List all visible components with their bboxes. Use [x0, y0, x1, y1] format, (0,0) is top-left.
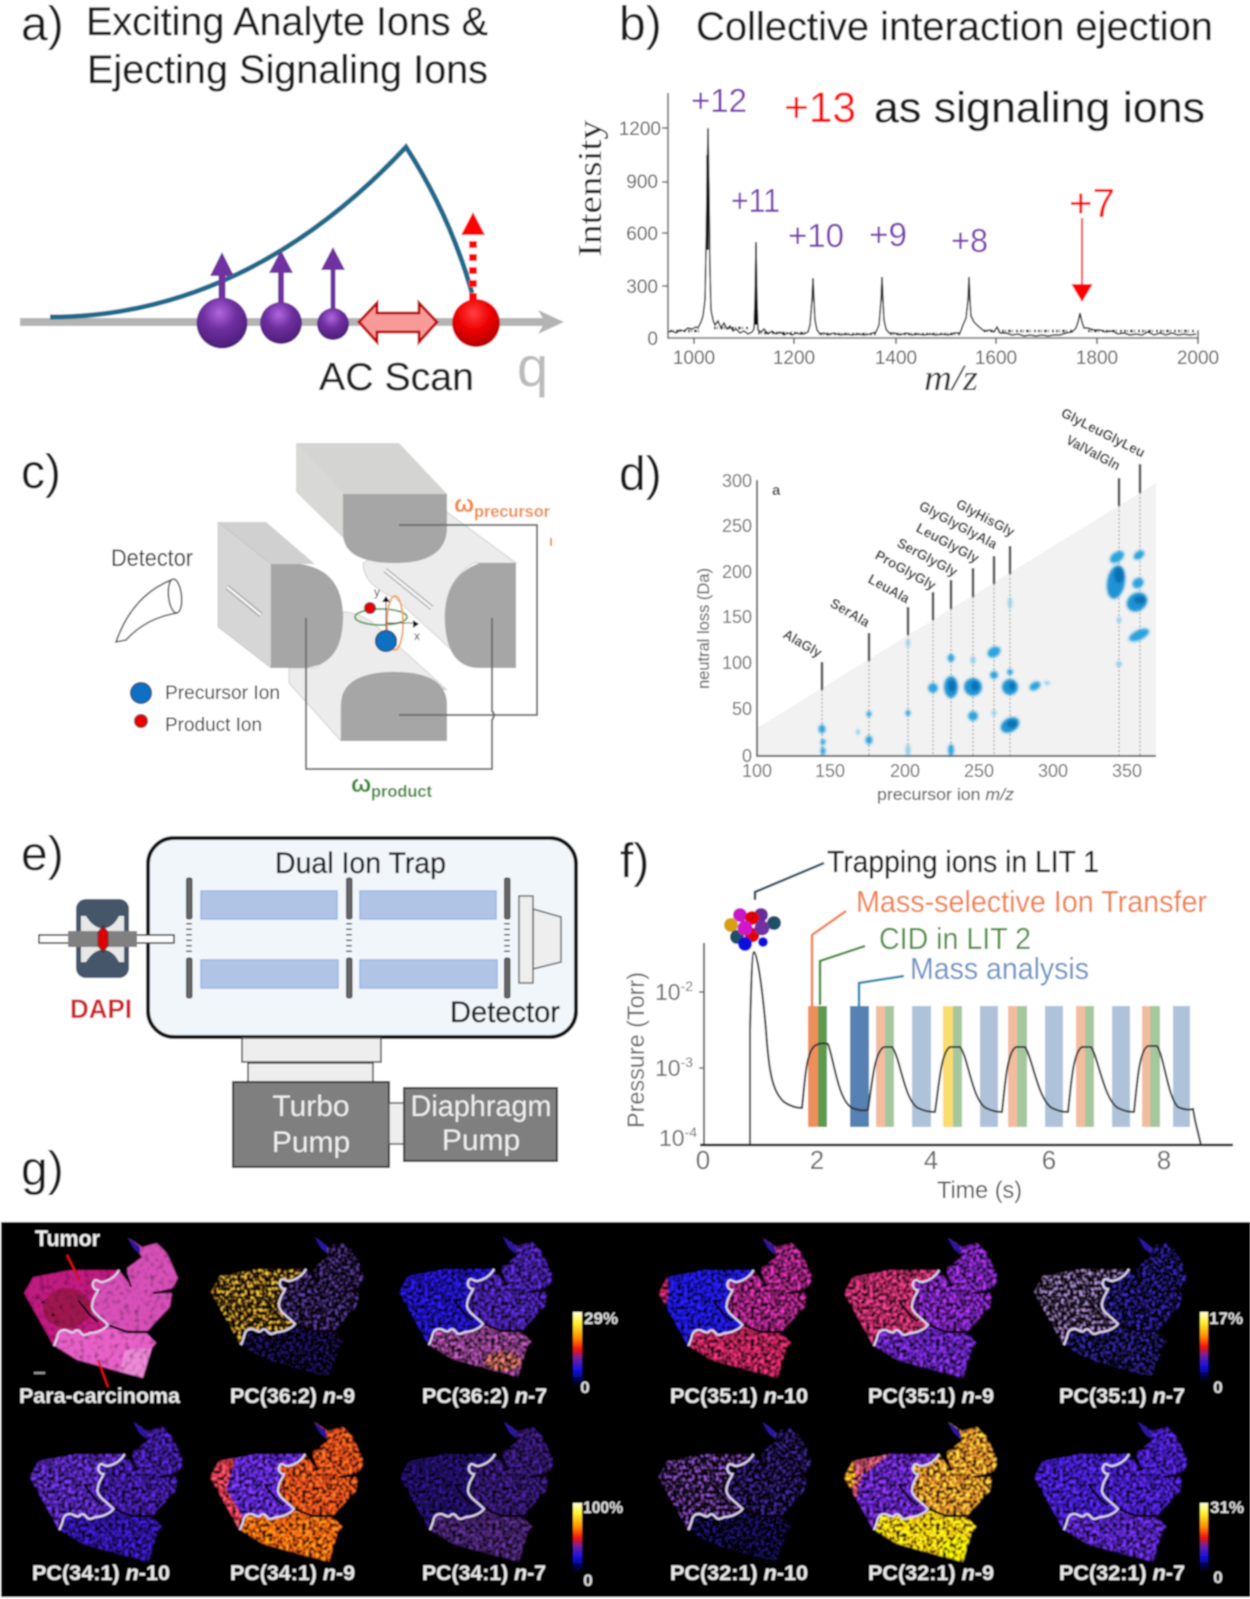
- legend: Precursor Ion: [165, 683, 280, 704]
- turbo pump: [233, 1082, 389, 1167]
- charge state labels: +11: [731, 182, 780, 219]
- y tick labels: 900: [626, 172, 658, 193]
- y tick labels d: 150: [722, 607, 752, 627]
- peptide labels: GlyHisGly: [954, 496, 1018, 540]
- peptide labels: [780, 404, 1148, 661]
- map labels: PC(35:1) n-10: [670, 1385, 808, 1408]
- map: PC(34:1) n-7: [400, 1422, 554, 1562]
- map labels: PC(32:1) n-9: [868, 1562, 994, 1585]
- y axis title d: neutral loss (Da): [694, 568, 713, 689]
- x tick labels d: 200: [890, 761, 920, 781]
- peptide labels: GlyLeuGlyLeu: [1059, 404, 1148, 460]
- solid label stems: [822, 464, 1140, 690]
- y tick labels: 0: [647, 329, 658, 350]
- y tick labels f: -2: [681, 978, 693, 994]
- colorbar 100%: 0: [583, 1571, 593, 1590]
- charge state labels: [691, 82, 988, 259]
- ion motion detail: x: [414, 629, 420, 643]
- map: PC(35:1) n-7: [1034, 1237, 1188, 1377]
- x tick labels f: 2: [810, 1145, 824, 1175]
- ion motion detail: [355, 585, 420, 652]
- y tick labels d: 100: [722, 653, 752, 673]
- charge state labels: +8: [951, 222, 988, 259]
- shaded triangle: [757, 483, 1156, 756]
- detector label: Detector: [111, 545, 193, 572]
- red arrow to +7 peak: [1073, 218, 1091, 300]
- x tick labels: 1400: [875, 348, 917, 369]
- legend: Product Ion: [165, 715, 262, 736]
- x tick labels d: 100: [742, 761, 772, 781]
- y tick labels d: 50: [732, 699, 752, 719]
- circuit wires: [306, 525, 537, 769]
- black background: [1, 1222, 1250, 1597]
- DAPI valve: [39, 899, 174, 978]
- charge state labels: +10: [788, 217, 844, 254]
- left electrode: [218, 522, 343, 668]
- x tick labels d: 250: [964, 761, 994, 781]
- signaling ions note: as signaling ions: [874, 84, 1205, 132]
- signaling ions note: +13: [784, 84, 856, 132]
- peptide labels: LeuGlyGly: [914, 520, 982, 566]
- inset letter: a: [772, 482, 781, 499]
- peptide labels: AlaGly: [780, 626, 825, 661]
- omega product label: ω: [351, 771, 371, 798]
- y tick labels d: 300: [722, 471, 752, 491]
- x tick labels f: 0: [696, 1145, 710, 1175]
- peptide labels: SerGlyGly: [895, 535, 961, 580]
- legend: [130, 682, 280, 736]
- top electrode: [296, 443, 447, 563]
- diaphragm pump: Diaphragm: [410, 1090, 552, 1123]
- colorbar 29%: [573, 1309, 618, 1397]
- spectrum axes: [662, 93, 1198, 344]
- AC scan label: AC Scan: [319, 356, 474, 399]
- x axis title: m/z: [924, 358, 978, 399]
- end plates: [186, 878, 510, 998]
- analysis label: Mass analysis: [910, 951, 1089, 986]
- title a: Exciting Analyte Ions &: [86, 0, 488, 44]
- map labels: PC(35:1) n-9: [868, 1385, 994, 1408]
- peptide labels: ProGlyGly: [873, 547, 939, 593]
- panel label e: e): [21, 828, 64, 881]
- map labels: PC(35:1) n-7: [1059, 1385, 1185, 1408]
- trapping label: Trapping ions in LIT 1: [827, 844, 1099, 879]
- x tick labels: 1800: [1076, 348, 1118, 369]
- panel b: mass spectrum: [572, 0, 1219, 399]
- turbo pump: Turbo: [272, 1090, 350, 1123]
- tumor annotation: [35, 1226, 100, 1281]
- map labels: PC(36:2) n-7: [422, 1385, 547, 1408]
- panel label d: d): [619, 448, 662, 501]
- dual ion trap label: Dual Ion Trap: [275, 847, 446, 880]
- x tick labels f: 8: [1157, 1145, 1171, 1175]
- red ejected ion with dashed arrow: [452, 212, 500, 347]
- trap electrodes: [201, 891, 497, 988]
- +7 label: +7: [1069, 180, 1115, 226]
- panel f: pressure trace: [620, 835, 1233, 1204]
- x tick labels d: 350: [1112, 761, 1142, 781]
- panel label g: g): [21, 1143, 64, 1196]
- map labels: PC(34:1) n-7: [422, 1562, 546, 1585]
- pump connector: [389, 1103, 404, 1144]
- map labels: PC(34:1) n-10: [32, 1562, 170, 1585]
- pressure curve: [750, 952, 1201, 1145]
- colorbar 31%: 31%: [1210, 1498, 1244, 1517]
- leader transfer: [812, 911, 846, 1007]
- x axis title f: Time (s): [937, 1177, 1022, 1204]
- omega product label: product: [371, 782, 432, 801]
- x tick labels: 1200: [773, 348, 815, 369]
- y axis title f: Pressure (Torr): [623, 972, 650, 1128]
- map: PC(32:1) n-9: [844, 1422, 998, 1562]
- vacuum chamber: [148, 838, 576, 1037]
- y tick labels d: 250: [722, 516, 752, 536]
- y tick labels: [619, 119, 661, 350]
- peptide labels: GlyGlyGlyAla: [917, 498, 1000, 552]
- x tick labels: [673, 348, 1219, 369]
- tumor annotation: Tumor: [35, 1226, 100, 1251]
- panel label f: f): [620, 835, 649, 888]
- charge state labels: +12: [691, 82, 747, 119]
- panel g: imaging maps: [1, 1222, 1250, 1597]
- y tick labels: 300: [626, 277, 658, 298]
- y tick labels d: [722, 471, 752, 766]
- dotted lines: [822, 493, 1140, 756]
- grid dashes: [189, 923, 507, 955]
- y tick labels f: -3: [681, 1054, 693, 1070]
- y tick labels f: 10: [659, 1125, 685, 1151]
- ion cluster icon: [724, 908, 781, 951]
- diaphragm pump: [404, 1088, 557, 1161]
- charge state labels: +9: [869, 216, 907, 253]
- leader trapping: [755, 863, 824, 900]
- peptide labels: ValValGln: [1064, 432, 1123, 473]
- purple ions with arrows: [196, 247, 349, 348]
- DAPI label: DAPI: [70, 994, 132, 1024]
- panel a: exciting and ejecting ions: [20, 0, 564, 399]
- colorbar 17%: 17%: [1209, 1309, 1243, 1328]
- map labels: PC(34:1) n-9: [230, 1562, 355, 1585]
- colorbar 31%: [1200, 1498, 1244, 1587]
- CID label: CID in LIT 2: [879, 921, 1031, 956]
- colorbar 100%: [573, 1498, 623, 1590]
- x tick labels f: 4: [924, 1145, 938, 1175]
- flange: [242, 1038, 381, 1082]
- map: PC(35:1) n-9: [844, 1238, 998, 1378]
- leader CID: [820, 946, 865, 1005]
- omega precursor label: ω: [454, 491, 474, 518]
- axes d: [757, 480, 1156, 756]
- detector icon: [116, 578, 183, 642]
- map labels: [32, 1385, 1185, 1585]
- panel e: instrument schematic: [21, 828, 576, 1196]
- x tick labels: 2000: [1177, 348, 1219, 369]
- colorbar 17%: 0: [1213, 1378, 1223, 1397]
- map: PC(36:2) n-9: [211, 1237, 365, 1377]
- colorbar 29%: 0: [580, 1378, 590, 1397]
- x tick labels d: 150: [815, 761, 845, 781]
- axes f: [699, 943, 1233, 1145]
- panel label c: c): [21, 446, 61, 499]
- leader analysis: [859, 976, 904, 1007]
- title a: Ejecting Signaling Ions: [87, 48, 488, 92]
- omega precursor label: [454, 491, 552, 546]
- rear light rod bodies: [289, 512, 516, 741]
- x tick labels f: 6: [1042, 1145, 1056, 1175]
- colorbar 100%: 100%: [583, 1498, 623, 1517]
- spectrum trace: [668, 128, 1196, 336]
- panel c: quadrupole schematic: [21, 443, 552, 801]
- x tick labels d: [742, 761, 1142, 781]
- blue signal blobs: [818, 548, 1151, 756]
- q label: q: [517, 335, 548, 398]
- x axis title d: precursor ion m/z: [877, 785, 1015, 804]
- x tick labels d: 300: [1038, 761, 1068, 781]
- x tick labels f: [696, 1145, 1171, 1175]
- map: H&E tissue: [24, 1238, 178, 1378]
- map: PC(32:1) n-7: [1034, 1422, 1188, 1562]
- AC scan double arrow: [359, 303, 437, 342]
- detector shape: [519, 896, 561, 983]
- diaphragm pump: Pump: [442, 1124, 520, 1157]
- timing bars: [808, 1006, 1190, 1127]
- map labels: PC(32:1) n-7: [1059, 1562, 1185, 1585]
- y tick labels f: 10: [655, 979, 681, 1005]
- map labels: PC(32:1) n-10: [670, 1562, 808, 1585]
- map: PC(34:1) n-9: [210, 1422, 364, 1562]
- map: PC(32:1) n-10: [658, 1422, 812, 1562]
- map labels: PC(36:2) n-9: [230, 1385, 355, 1408]
- y tick labels: 1200: [619, 119, 661, 140]
- para-carcinoma annotation: Para-carcinoma: [19, 1385, 180, 1408]
- y tick labels: 600: [626, 224, 658, 245]
- panel d: neutral loss map: [619, 404, 1156, 804]
- peptide labels: LeuAla: [866, 571, 913, 607]
- para-carcinoma annotation: [19, 1360, 180, 1408]
- y tick labels f: -4: [685, 1124, 697, 1140]
- omega precursor label: precursor: [474, 502, 550, 521]
- colorbar 31%: 0: [1213, 1568, 1223, 1587]
- omega product label: [351, 771, 432, 801]
- x tick labels: 1000: [673, 348, 715, 369]
- turbo pump: Pump: [272, 1126, 350, 1159]
- y tick labels d: 0: [742, 746, 752, 766]
- map: PC(35:1) n-10: [658, 1238, 812, 1378]
- ion motion detail: y: [374, 585, 380, 599]
- y tick labels f: 10: [655, 1055, 681, 1081]
- detector text e: Detector: [450, 996, 560, 1029]
- colorbar 17%: [1200, 1309, 1243, 1397]
- stability curve: [50, 147, 472, 317]
- title a: [86, 0, 488, 92]
- q axis arrow: [20, 310, 564, 334]
- y tick labels d: 200: [722, 562, 752, 582]
- title b: Collective interaction ejection: [696, 5, 1213, 49]
- x tick labels: 1600: [975, 348, 1017, 369]
- y tick labels f: [655, 978, 697, 1151]
- y axis title: Intensity: [572, 120, 609, 257]
- map: PC(36:2) n-7: [399, 1237, 553, 1377]
- colorbar 29%: 29%: [584, 1309, 618, 1328]
- peptide labels: SerAla: [828, 595, 873, 630]
- transfer label: Mass-selective Ion Transfer: [856, 884, 1207, 919]
- right electrode: [385, 563, 516, 668]
- map: PC(34:1) n-10: [30, 1422, 184, 1562]
- bottom electrode: [341, 672, 447, 741]
